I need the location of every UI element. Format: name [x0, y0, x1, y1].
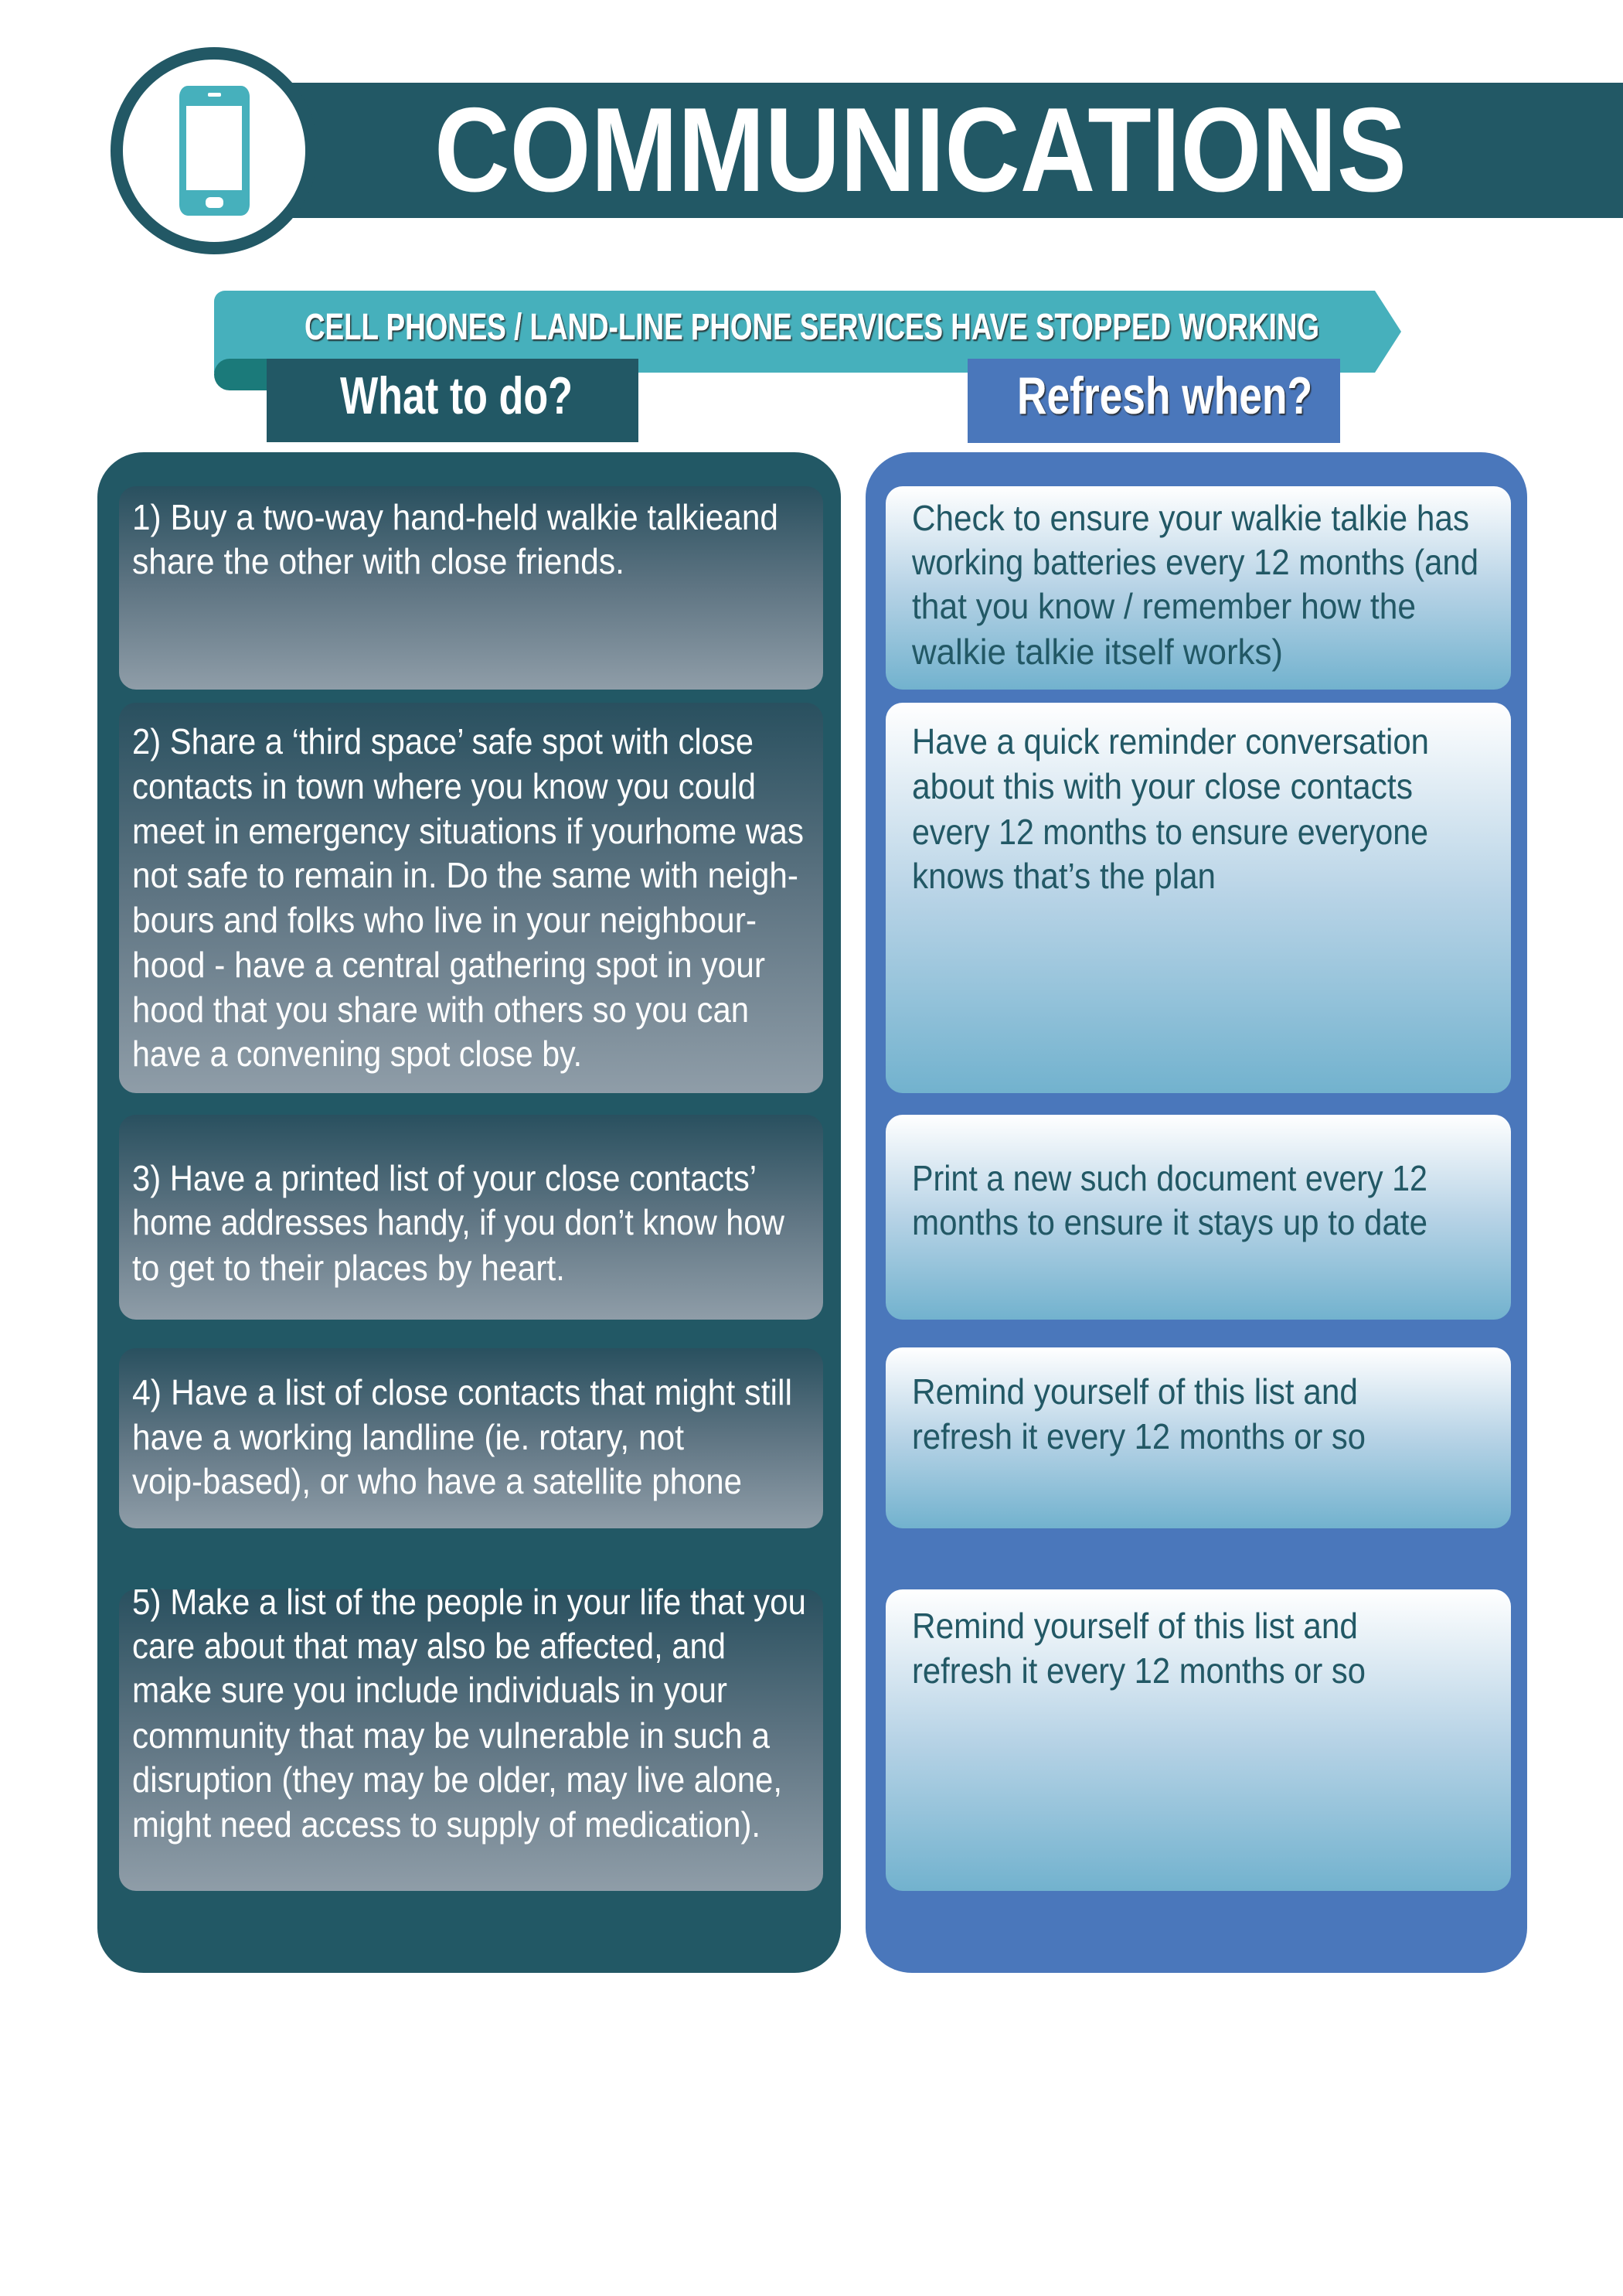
card: step 5: might need access to supply of medication).: [132, 1804, 760, 1845]
card: step 3: home addresses handy, if you don’t know how: [132, 1202, 785, 1242]
card: step 5: [119, 1582, 823, 1891]
heading: what to do: What to do?: [340, 366, 573, 425]
card: refresh 2: Have a quick reminder conversation: [912, 721, 1429, 761]
card: step 2: contacts in town where you know you could: [132, 766, 756, 806]
icon: smartphone: [179, 86, 250, 216]
card: step 5: disruption (they may be older, may live alone,: [132, 1759, 782, 1800]
card: refresh 4: [886, 1347, 1511, 1528]
card: step 1: [119, 486, 823, 690]
card: refresh 2: every 12 months to ensure everyone: [912, 812, 1428, 852]
card: step 2: meet in emergency situations if yourhome was: [132, 811, 804, 851]
ribbon text: CELL PHONES / LAND-LINE PHONE SERVICES HAVE STOPPED WORKING: [305, 307, 1319, 348]
card: refresh 2: [886, 703, 1511, 1093]
header banner: [232, 83, 1623, 218]
card: refresh 5: refresh it every 12 months or so: [912, 1650, 1366, 1691]
card: refresh 2: knows that’s the plan: [912, 856, 1216, 896]
card: step 5: make sure you include individuals in your: [132, 1670, 727, 1710]
card: step 5: community that may be vulnerable in such a: [132, 1715, 770, 1756]
card: step 1: 1) Buy a two-way hand-held walkie talkieand: [132, 497, 778, 537]
heading: refresh when: [968, 359, 1340, 443]
card: refresh 1: [886, 486, 1511, 690]
card: step 1: share the other with close friends.: [132, 541, 624, 581]
card: step 2: hood that you share with others so you can: [132, 990, 749, 1030]
card: refresh 4: Remind yourself of this list and: [912, 1371, 1358, 1412]
card: refresh 5: Remind yourself of this list and: [912, 1606, 1358, 1646]
card: step 2: have a convening spot close by.: [132, 1034, 582, 1074]
card: step 3: [119, 1115, 823, 1320]
icon: phone in circle: [117, 53, 311, 248]
card: step 2: not safe to remain in. Do the same with neigh-: [132, 855, 798, 895]
card: step 2: hood - have a central gathering spot in your: [132, 945, 765, 985]
card: step 2: [119, 703, 823, 1093]
panel: what to do: [97, 452, 841, 1973]
card: refresh 1: that you know / remember how the: [912, 586, 1416, 626]
card: step 4: voip-based), or who have a satellite phone: [132, 1461, 742, 1501]
card: step 5: 5) Make a list of the people in your life that you: [132, 1582, 806, 1622]
card: step 2: 2) Share a ‘third space’ safe spot with close: [132, 721, 754, 761]
card: refresh 1: Check to ensure your walkie talkie has: [912, 498, 1469, 538]
card: refresh 3: Print a new such document every 12: [912, 1158, 1427, 1198]
title: COMMUNICATIONS: [434, 83, 1407, 216]
heading: what to do: [267, 359, 638, 442]
ribbon: situation banner: [214, 291, 1401, 390]
card: refresh 1: walkie talkie itself works): [911, 632, 1283, 672]
card: refresh 1: working batteries every 12 months (and: [911, 542, 1478, 582]
ribbon fold: [214, 359, 267, 390]
card: step 3: to get to their places by heart.: [132, 1248, 565, 1288]
card: step 3: 3) Have a printed list of your close contacts’: [132, 1158, 757, 1198]
panel: refresh when: [866, 452, 1527, 1973]
card: step 4: 4) Have a list of close contacts that might still: [132, 1372, 792, 1412]
card: refresh 4: refresh it every 12 months or so: [912, 1416, 1366, 1456]
card: refresh 3: [886, 1115, 1511, 1320]
card: step 4: have a working landline (ie. rotary, not: [132, 1417, 684, 1457]
card: step 2: bours and folks who live in your neighbour-: [132, 900, 757, 940]
heading: refresh when: Refresh when?: [1017, 366, 1312, 425]
card: refresh 2: about this with your close contacts: [912, 766, 1413, 806]
card: refresh 3: months to ensure it stays up to date: [912, 1202, 1427, 1242]
card: step 5: care about that may also be affected, and: [132, 1626, 726, 1666]
card: refresh 5: [886, 1589, 1511, 1891]
card: step 4: [119, 1348, 823, 1528]
